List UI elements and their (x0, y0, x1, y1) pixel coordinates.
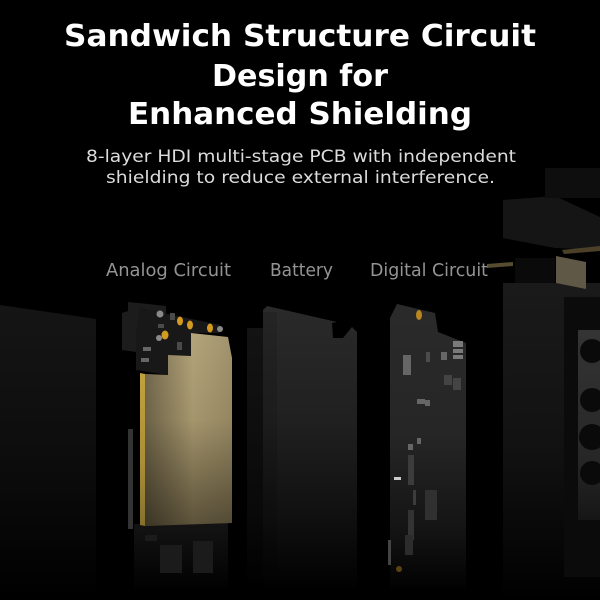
panel: rear battery frame (247, 328, 264, 590)
gold ribbon right (562, 246, 600, 254)
bottom capacitor (396, 566, 402, 572)
grey speaker panel (578, 330, 600, 520)
upper bracket (545, 168, 600, 198)
title: Sandwich Structure Circuit (64, 19, 536, 54)
panel: analog circuit board (122, 302, 232, 592)
lower board chips (145, 535, 213, 573)
neck (515, 258, 555, 283)
components (388, 341, 463, 565)
inner frame (564, 297, 600, 577)
board body (390, 304, 466, 592)
tower body (503, 283, 600, 600)
battery body (263, 306, 357, 592)
lower circuit board (134, 522, 228, 592)
title: Enhanced Shielding (128, 97, 472, 132)
shield shading (145, 333, 232, 526)
gold shield plate (145, 333, 232, 526)
title: Design for (212, 59, 388, 94)
panel: battery (263, 306, 357, 592)
subtitle: shielding to reduce external interference. (106, 168, 495, 187)
gold ribbon left (487, 262, 513, 268)
panel: left housing shell (0, 305, 96, 600)
subtitle (86, 147, 517, 187)
gold capacitor (416, 310, 422, 320)
circuit board top (136, 308, 220, 375)
top module (503, 196, 600, 250)
subtitle: 8-layer HDI multi-stage PCB with independent (86, 147, 517, 166)
gold shield edge (140, 373, 145, 526)
panel: right housing tower (487, 168, 600, 600)
connector block (122, 302, 166, 372)
side rail (128, 429, 133, 529)
label: digital circuit: Digital Circuit (370, 261, 488, 281)
speaker holes (579, 339, 600, 485)
label: analog circuit: Analog Circuit (106, 261, 231, 281)
battery side highlight (263, 312, 277, 572)
silver components (141, 310, 223, 362)
tan block (556, 256, 586, 289)
gold capacitors (162, 316, 213, 340)
label: battery: Battery (270, 261, 333, 281)
title (64, 19, 536, 132)
panel: digital circuit board (388, 304, 466, 592)
component labels (106, 261, 488, 281)
